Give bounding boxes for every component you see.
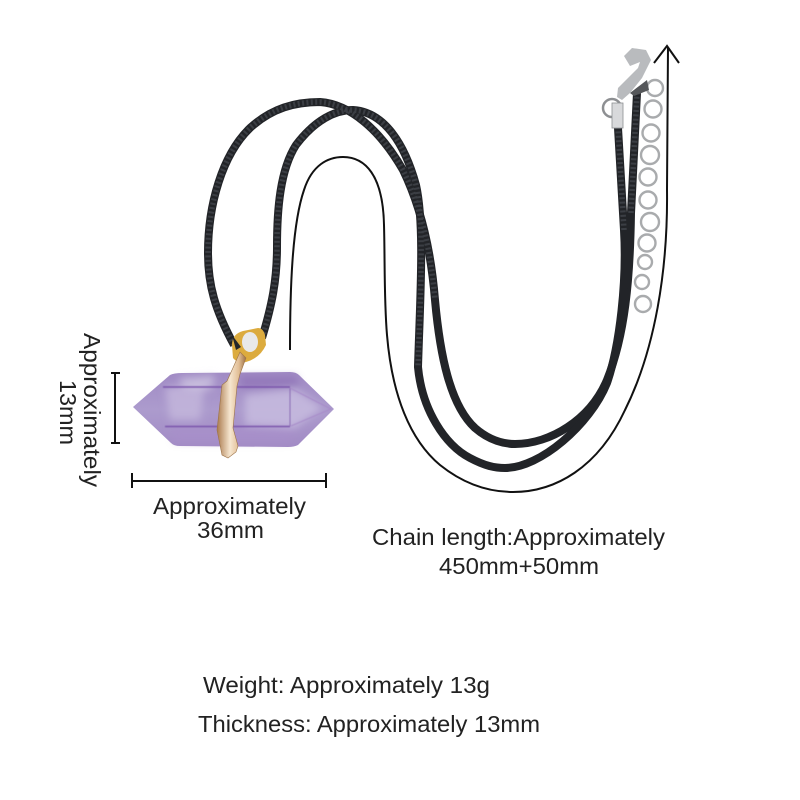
label: chain length: Chain length:Approximately xyxy=(372,524,666,550)
arrow: chain length xyxy=(290,46,679,492)
thickness: Thickness: Approximately 13mm xyxy=(198,711,540,737)
label: length value: 36mm xyxy=(197,517,264,543)
dimension: height xyxy=(111,373,120,443)
label: length: Approximately xyxy=(153,493,307,519)
necklace xyxy=(208,48,663,468)
pendant xyxy=(133,328,334,458)
crystal xyxy=(133,372,334,447)
dimension: length xyxy=(132,473,326,488)
label: height value: 13mm xyxy=(55,380,81,445)
label: chain length value: 450mm+50mm xyxy=(439,553,599,579)
clasp xyxy=(603,48,651,128)
gold band xyxy=(217,352,246,458)
label: height: Approximately xyxy=(79,333,105,488)
weight: Weight: Approximately 13g xyxy=(203,672,490,698)
extension chain xyxy=(635,80,663,312)
bail ring xyxy=(232,328,266,362)
cords xyxy=(208,93,637,468)
